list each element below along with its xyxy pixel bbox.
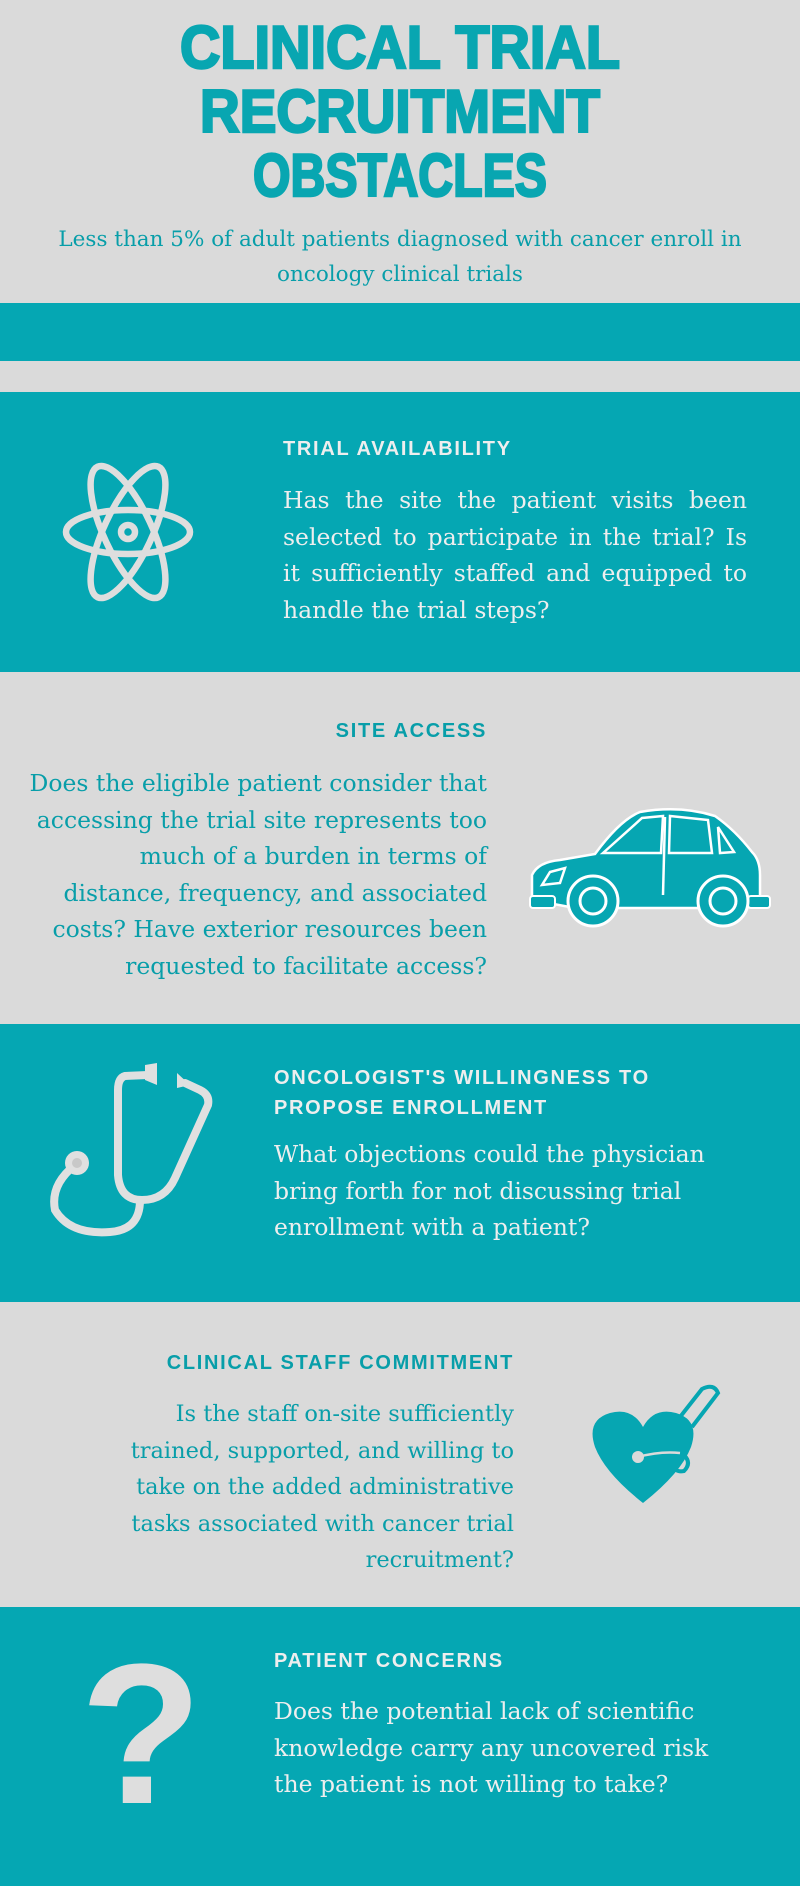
body text: knowledge carry any uncovered risk xyxy=(274,1734,708,1762)
body text: Does the eligible patient consider that xyxy=(30,769,487,797)
body text: Has the site the patient visits been xyxy=(283,486,747,514)
body text: recruitment? xyxy=(366,1547,514,1573)
icon: stethoscope xyxy=(50,1063,212,1236)
body text: enrollment with a patient? xyxy=(274,1213,590,1241)
heading: PROPOSE ENROLLMENT xyxy=(274,1097,548,1119)
panel: trial availability xyxy=(0,392,800,672)
title xyxy=(180,14,620,209)
body text xyxy=(274,1140,705,1241)
heading xyxy=(274,1067,650,1119)
body text: requested to facilitate access? xyxy=(125,952,487,980)
icon: atom xyxy=(62,462,194,602)
subtitle xyxy=(58,227,742,287)
body text: trained, supported, and willing to xyxy=(131,1438,514,1464)
body text: handle the trial steps? xyxy=(283,596,549,624)
subtitle: oncology clinical trials xyxy=(277,262,523,287)
heading: PATIENT CONCERNS xyxy=(274,1650,504,1672)
icon: question mark: ? xyxy=(80,1623,202,1846)
body text: accessing the trial site represents too xyxy=(37,806,487,834)
title: CLINICAL TRIAL xyxy=(180,14,620,81)
body text: it sufficiently staffed and equipped to xyxy=(283,559,747,587)
body text: costs? Have exterior resources been xyxy=(52,915,487,943)
body text: selected to participate in the trial? Is xyxy=(283,522,747,550)
panel: site access xyxy=(30,720,771,980)
icon: heart with stethoscope xyxy=(592,1384,720,1503)
body text xyxy=(283,486,747,624)
heading: SITE ACCESS xyxy=(336,720,487,742)
body text: Does the potential lack of scientific xyxy=(274,1697,694,1725)
body text: take on the added administrative xyxy=(136,1474,514,1500)
body text: much of a burden in terms of xyxy=(140,842,487,870)
panel: patient concerns xyxy=(0,1607,800,1886)
panel: clinical staff commitment xyxy=(131,1352,720,1573)
icon: car xyxy=(529,808,771,928)
title: RECRUITMENT xyxy=(200,78,600,145)
body text: the patient is not willing to take? xyxy=(274,1770,668,1798)
body text: distance, frequency, and associated xyxy=(63,878,487,906)
body text xyxy=(274,1697,708,1798)
teal band xyxy=(0,303,800,361)
body text xyxy=(131,1401,514,1573)
title: OBSTACLES xyxy=(253,142,547,209)
panel: oncologist's willingness xyxy=(0,1024,800,1302)
body text: bring forth for not discussing trial xyxy=(274,1176,681,1204)
heading: CLINICAL STAFF COMMITMENT xyxy=(167,1352,514,1374)
body text xyxy=(30,769,488,980)
body text: What objections could the physician xyxy=(274,1140,705,1168)
subtitle: Less than 5% of adult patients diagnosed with cancer enroll in xyxy=(58,227,742,252)
body text: Is the staff on-site sufficiently xyxy=(176,1401,514,1427)
heading: TRIAL AVAILABILITY xyxy=(283,438,512,460)
body text: tasks associated with cancer trial xyxy=(131,1510,514,1536)
heading: ONCOLOGIST'S WILLINGNESS TO xyxy=(274,1067,650,1089)
